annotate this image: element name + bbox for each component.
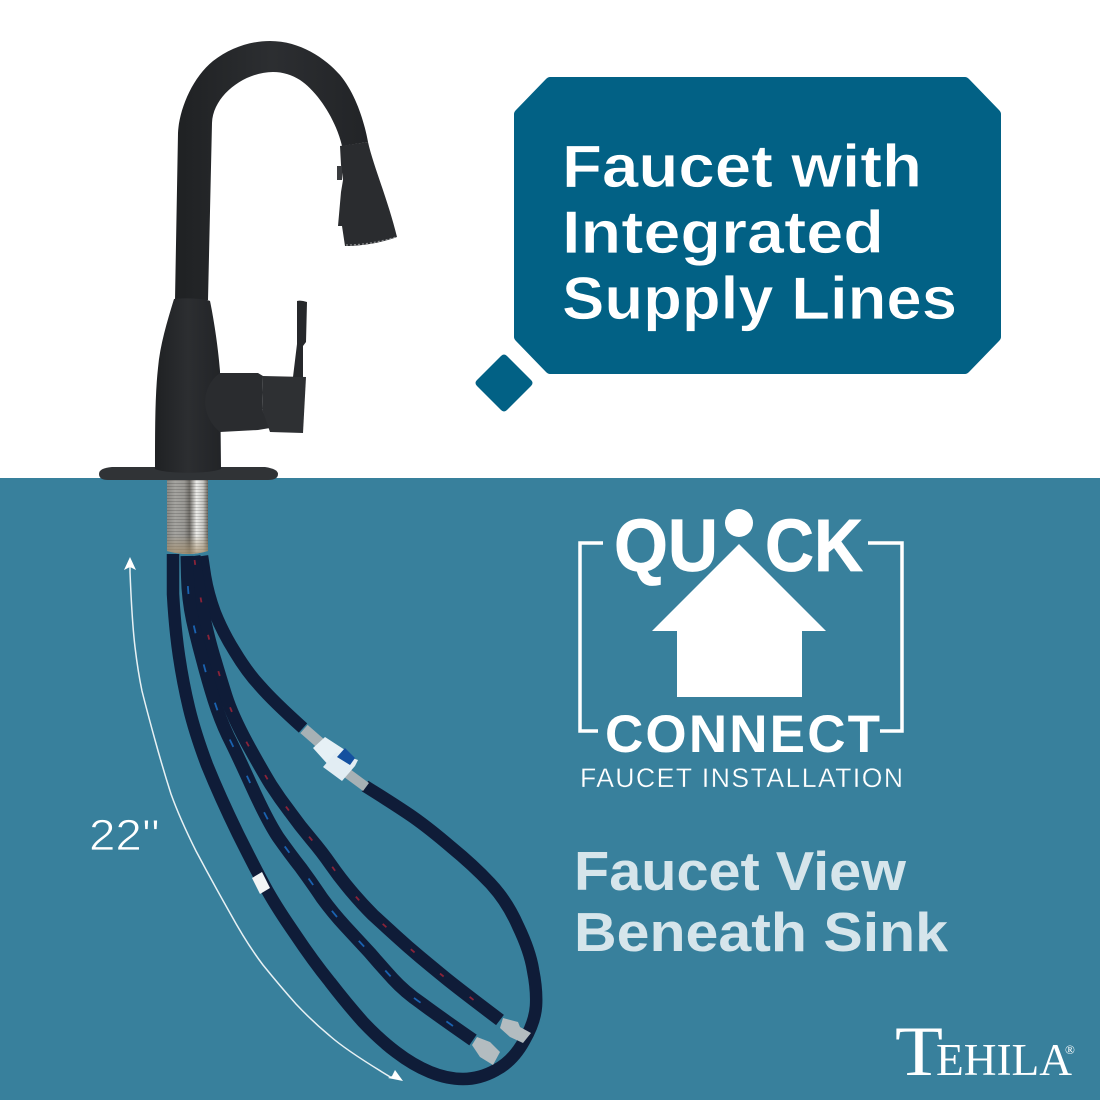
upper steel ferrule	[304, 729, 320, 743]
caption: faucet view beneath sink: Beneath Sink	[574, 901, 948, 963]
callout: faucet with integrated supply lines	[476, 77, 1001, 412]
length label: 22''	[89, 811, 160, 860]
hose end fittings	[472, 1018, 531, 1065]
callout box	[514, 77, 1001, 374]
connector upper body	[313, 737, 345, 768]
spray button	[337, 166, 342, 180]
quick connect fitting	[304, 729, 366, 787]
blue release tab	[337, 748, 355, 765]
spout	[175, 41, 368, 300]
background: teal lower panel	[0, 478, 1100, 1100]
brand logo: Tehila: ®	[1065, 1042, 1075, 1057]
spray head	[338, 142, 397, 246]
length arrow	[124, 557, 403, 1081]
supply hoses	[173, 554, 536, 1079]
logo word: QUICK: QU	[614, 504, 718, 587]
handle cap	[262, 376, 306, 433]
callout text: Integrated	[562, 199, 884, 266]
callout diamond pointer	[476, 354, 532, 412]
logo bracket	[580, 543, 902, 731]
hose: quick connect line, upper run	[202, 556, 303, 728]
lower steel ferrule	[347, 773, 366, 787]
caption: faucet view beneath sink: Faucet View	[574, 840, 906, 902]
curved line	[130, 567, 392, 1078]
callout text: Faucet with	[562, 133, 922, 200]
threaded shank	[167, 478, 208, 554]
fitting: cold line	[472, 1037, 500, 1065]
logo word: CONNECT: CONNECT	[605, 705, 880, 764]
arrowhead top	[124, 557, 136, 570]
spray face	[346, 237, 396, 245]
brand logo: Tehila	[895, 1013, 1075, 1091]
hose: long quick connect line, lower run	[173, 554, 536, 1079]
background: white upper area	[0, 0, 1100, 478]
faucet base body	[155, 298, 221, 473]
callout text: Supply Lines	[562, 265, 957, 332]
connector lower body	[323, 752, 358, 781]
arrowhead bottom	[388, 1070, 403, 1081]
handle connector	[205, 373, 270, 432]
quick connect logo	[580, 504, 903, 793]
deck plate	[99, 467, 278, 480]
handle lever	[293, 301, 307, 377]
brand logo: Tehila: T	[895, 1013, 943, 1091]
hose: hot water line	[194, 556, 500, 1020]
faucet	[99, 41, 397, 480]
hose: cold water line	[187, 556, 473, 1040]
logo word: QUICK	[614, 504, 863, 587]
logo dot	[725, 509, 753, 537]
fitting: hot line	[500, 1018, 531, 1043]
brand logo: Tehila: EHILA	[936, 1035, 1072, 1085]
logo word: QUICK: CK	[765, 504, 863, 587]
callout text	[562, 133, 957, 332]
logo house arrow	[652, 544, 826, 697]
caption: faucet view beneath sink	[574, 840, 948, 963]
hose label band	[252, 872, 270, 894]
logo subtitle: FAUCET INSTALLATION	[580, 763, 903, 793]
